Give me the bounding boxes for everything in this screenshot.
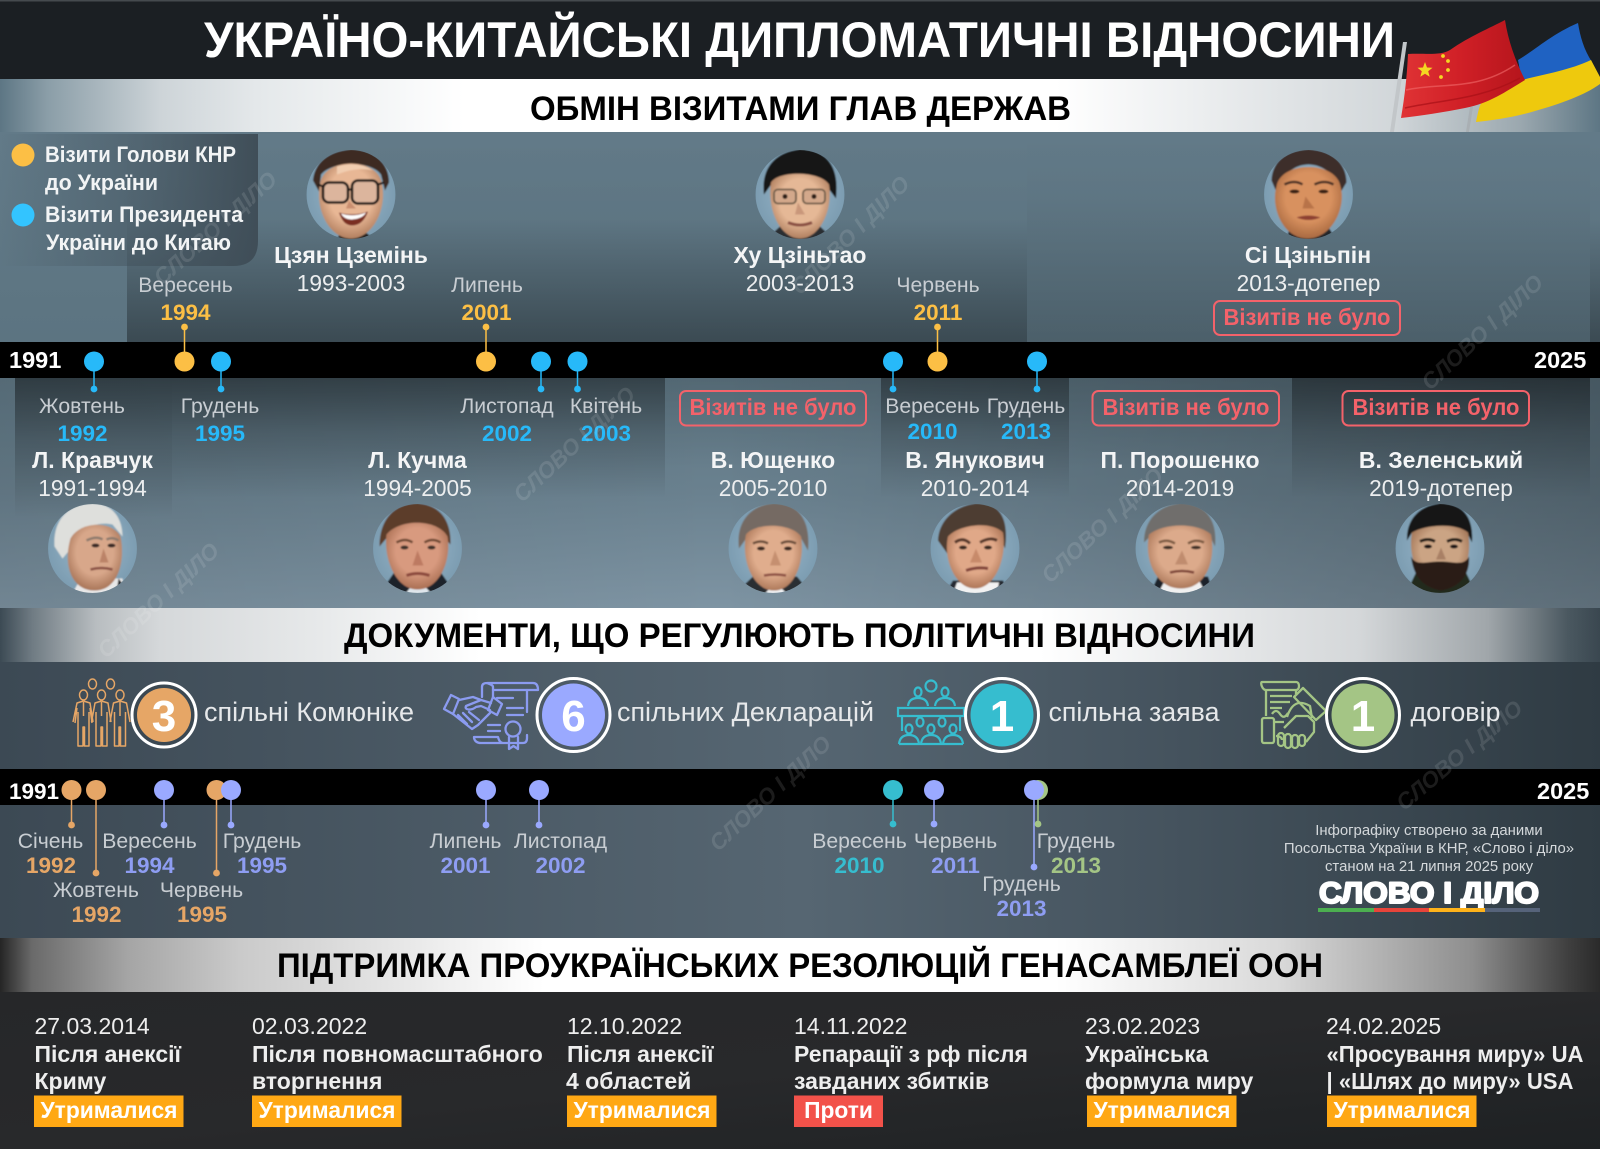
legend panel [0, 134, 258, 266]
marker: December 2013 [1027, 352, 1047, 392]
watermarks [93, 166, 1548, 856]
label: December 1995: Грудень [181, 395, 259, 418]
badge: 3 [132, 683, 196, 747]
timeline: documents [0, 769, 1600, 876]
end year: 2025 [1537, 778, 1589, 804]
label: December 1995: 1995 [237, 853, 287, 878]
resolution: 23.02.2023: Утрималися [1093, 1097, 1231, 1123]
label: September 1994: 1994 [124, 853, 175, 878]
label: April 2003: 2003 [581, 421, 631, 446]
label: June 1995: Червень [160, 879, 243, 902]
label: October 1992 [39, 395, 125, 446]
label: December 1995: 1995 [195, 421, 245, 446]
leader: Kuchma: 1994-2005 [363, 475, 472, 501]
marker: January 1992 [62, 780, 82, 828]
leader: Jiang Zemin: 1993-2003 [297, 270, 405, 296]
label: July 2001 [430, 830, 501, 878]
leader: Zelensky: В. Зеленський [1359, 447, 1523, 473]
resolution: 24.02.2025: Утрималися [1333, 1097, 1471, 1123]
title bar [0, 0, 1600, 79]
label: September 2010 [812, 830, 907, 878]
resolution: 27.03.2014: Криму [34, 1068, 106, 1094]
marker: April 2003 [568, 352, 588, 392]
document stat: communiques [73, 679, 414, 747]
leader: Yanukovych: 2010-2014 [921, 475, 1029, 501]
label: November 2002: Листопад [460, 395, 554, 418]
label: July 2001: Липень [430, 830, 501, 853]
marker: July 2001 [476, 324, 496, 372]
resolution: 12.10.2022: Утрималися [573, 1097, 711, 1123]
flag pole: Ukraine [1466, 107, 1473, 132]
legend label: chairman visits: до України [45, 170, 158, 195]
marker: June 1995 [206, 780, 226, 876]
resolution: 14.11.2022 [794, 1013, 1028, 1127]
credits text: станом на 21 липня 2025 року [1325, 859, 1534, 875]
badge: 1 green: 1 [1351, 692, 1375, 741]
label: June 1995: 1995 [177, 902, 227, 927]
leader: Zelensky: 2019-дотепер [1369, 475, 1513, 501]
title: УКРАЇНО-КИТАЙСЬКІ ДИПЛОМАТИЧНІ ВІДНОСИНИ [204, 11, 1395, 68]
label: September 2010: 2010 [834, 853, 885, 878]
icon: handshake and contract [1261, 682, 1326, 748]
label: September 1994 [138, 274, 233, 325]
resolution: 24.02.2025 [1326, 1013, 1584, 1127]
label: January 1992: 1992 [26, 853, 76, 878]
flag: China [1401, 20, 1525, 118]
stars [1418, 54, 1450, 79]
badge: 1 teal: 1 [990, 692, 1014, 741]
label: December 2013 green [1037, 830, 1115, 878]
icon: people [73, 679, 130, 746]
label: January 1992 [18, 830, 83, 878]
marker: November 2002 [529, 780, 549, 828]
marker: December 2013 purple [1024, 780, 1044, 870]
label: June 2011: 2011 [931, 853, 980, 878]
marker: September 2010 [883, 780, 903, 827]
label: December 2013 green: 2013 [1051, 853, 1101, 878]
section heading band: visits [0, 79, 1600, 132]
marker: December 1995 [221, 780, 241, 828]
portrait: Yushchenko [728, 504, 818, 594]
label: September 2010: 2010 [907, 419, 958, 444]
leader: Poroshenko: П. Порошенко [1100, 447, 1260, 473]
resolution: 12.10.2022 [566, 1013, 716, 1127]
resolution: 23.02.2023: формула миру [1085, 1068, 1254, 1094]
label: September 2010: Вересень [885, 395, 980, 418]
label: June 2011: 2011 [914, 300, 962, 325]
callout: no visits, Zelensky: Візитів не було [1352, 394, 1520, 420]
resolution: 02.03.2022: 02.03.2022 [252, 1013, 367, 1039]
label: July 2001 [451, 274, 523, 325]
resolution: 12.10.2022: 4 областей [566, 1068, 691, 1094]
resolution: 24.02.2025: | «Шлях до миру» USA [1326, 1068, 1574, 1094]
label: December 2013 green: Грудень [1037, 830, 1115, 853]
label: June 2011: Червень [914, 830, 997, 853]
watermarks: СЛОВО І ДІЛО [93, 537, 224, 663]
label: December 1995: Грудень [223, 830, 301, 853]
leader: Yushchenko: В. Ющенко [711, 447, 835, 473]
label: December 2013: Грудень [987, 395, 1065, 418]
end year: 2025 [1534, 347, 1586, 373]
badge: 3: 3 [152, 692, 176, 741]
watermarks: СЛОВО І ДІЛО [1391, 695, 1528, 815]
timeline: visits [0, 324, 1600, 392]
legend label: president visits: Візити Президента [45, 202, 244, 227]
callout: no visits, Yushchenko: Візитів не було [690, 394, 856, 420]
leader: Xi Jinping [1237, 242, 1380, 296]
marker: December 1995 [211, 352, 231, 392]
portrait: Kravchuk [48, 504, 138, 594]
portrait: Poroshenko [1135, 504, 1225, 594]
resolution: 14.11.2022: Репарації з рф після [794, 1041, 1028, 1067]
label: June 1995 [160, 879, 243, 927]
label: December 2013 purple: Грудень [982, 873, 1061, 896]
legend label: president visits: України до Китаю [46, 230, 231, 255]
marker: July 2001 [476, 780, 496, 828]
leader: Kravchuk [32, 447, 153, 501]
label: October 1992: 1992 [57, 421, 108, 446]
label: September 2010 [885, 395, 980, 444]
resolution: 24.02.2025: 24.02.2025 [1326, 1013, 1441, 1039]
callout: no visits, Poroshenko: Візитів не було [1102, 394, 1270, 420]
resolution: 12.10.2022: 12.10.2022 [567, 1013, 682, 1039]
leader: Xi Jinping: 2013-дотепер [1237, 270, 1380, 296]
leader: Yanukovych: В. Янукович [905, 447, 1045, 473]
resolution: 24.02.2025: «Просування миру» UA [1326, 1041, 1584, 1067]
label: September 2010: Вересень [812, 830, 907, 853]
legend label: president visits [45, 202, 244, 255]
label: December 1995 [223, 830, 301, 878]
resolution: 14.11.2022: Проти [804, 1097, 873, 1123]
badge: 6: 6 [561, 692, 586, 741]
legend dot: chairman visits [12, 144, 34, 166]
leader: Hu Jintao: Ху Цзіньтао [734, 242, 866, 268]
resolution: 27.03.2014 [34, 1013, 184, 1127]
document stat: declarations [444, 678, 874, 752]
section heading band: resolutions [0, 938, 1600, 992]
label: December 2013 purple: 2013 [996, 896, 1047, 921]
resolution: 23.02.2023 [1085, 1013, 1254, 1127]
logo: Slovo i Dilo: СЛОВО І ДІЛО [1319, 877, 1539, 910]
legend dot: president visits [12, 204, 34, 226]
marker: June 2011 [924, 780, 944, 827]
leader: Hu Jintao: 2003-2013 [746, 270, 854, 296]
leader: Jiang Zemin [274, 242, 428, 296]
legend label: chairman visits [45, 142, 236, 195]
leader: Kravchuk: 1991-1994 [38, 475, 147, 501]
leader: Yushchenko [711, 447, 835, 501]
panel: documents background [0, 662, 1600, 769]
icon: handshake and scroll [444, 683, 538, 749]
label: treaty: договір [1410, 697, 1500, 727]
label: September 1994 [102, 830, 197, 878]
marker: December 2013 green [1028, 780, 1048, 827]
portrait: Xi Jinping [1264, 150, 1354, 240]
label: December 2013 purple [982, 873, 1061, 921]
label: April 2003 [570, 395, 642, 446]
label: November 2002 [514, 830, 607, 878]
label: September 1994: 1994 [160, 300, 211, 325]
resolution: 02.03.2022: Утрималися [258, 1097, 396, 1123]
resolution: 27.03.2014: 27.03.2014 [34, 1013, 150, 1039]
label: June 2011: Червень [896, 274, 980, 297]
portrait: Jiang Zemin [306, 150, 396, 240]
callout: no visits, Xi: Візитів не було [1224, 304, 1390, 330]
badge: 1 teal [966, 678, 1038, 752]
label: April 2003: Квітень [570, 395, 642, 418]
label: November 2002: 2002 [535, 853, 586, 878]
label: December 1995 [181, 395, 259, 446]
flag: Ukraine [1476, 23, 1600, 122]
flag pole: China [1390, 42, 1407, 132]
portrait: Hu Jintao [755, 150, 845, 240]
leader: Zelensky [1359, 447, 1523, 501]
label: October 1992: Жовтень [53, 879, 139, 902]
label: October 1992 [53, 879, 139, 927]
marker: September 2010 [883, 352, 903, 392]
label: joint statement: спільна заява [1048, 697, 1220, 727]
credits text: Інфографіку створено за даними [1315, 823, 1543, 839]
portrait: Zelensky [1395, 504, 1485, 594]
flags [1390, 20, 1600, 132]
label: June 2011 [896, 274, 980, 325]
panel: heads of state background [0, 132, 1600, 608]
document stat: treaty [1261, 678, 1500, 752]
resolution: 12.10.2022: Після анексії [567, 1041, 714, 1067]
portrait: Kuchma [372, 504, 462, 594]
resolution: 23.02.2023: Українська [1085, 1041, 1209, 1067]
label: January 1992: Січень [18, 830, 83, 853]
label: July 2001: 2001 [440, 853, 491, 878]
credits text [1284, 823, 1574, 875]
label: December 2013: 2013 [1001, 419, 1051, 444]
portrait: Yanukovych [930, 504, 1020, 594]
panel: documents timeline background [0, 805, 1600, 938]
label: communiques: спільні Комюніке [204, 697, 414, 727]
leader: Hu Jintao [734, 242, 866, 296]
watermarks: СЛОВО І ДІЛО [786, 171, 915, 300]
label: September 1994: Вересень [102, 830, 197, 853]
resolution: 27.03.2014: Після анексії [34, 1041, 181, 1067]
heading: visits: ОБМІН ВІЗИТАМИ ГЛАВ ДЕРЖАВ [530, 90, 1071, 128]
credits text: Посольства України в КНР, «Слово і діло» [1284, 841, 1574, 857]
marker: June 2011 [928, 324, 948, 372]
icon: meeting table [898, 680, 964, 744]
marker: October 1992 [84, 352, 104, 392]
marker: November 2002 [531, 352, 551, 392]
resolution: 02.03.2022: вторгнення [252, 1068, 382, 1094]
watermarks: СЛОВО І ДІЛО [509, 381, 640, 507]
label: September 1994: Вересень [138, 274, 233, 297]
label: October 1992: 1992 [71, 902, 122, 927]
marker: October 1992 [86, 780, 106, 876]
resolution: 27.03.2014: Утрималися [40, 1097, 178, 1123]
leader: Yushchenko: 2005-2010 [719, 475, 827, 501]
legend label: chairman visits: Візити Голови КНР [45, 142, 236, 167]
leader: Yanukovych [905, 447, 1045, 501]
badge: 1 green [1326, 678, 1400, 752]
label: declarations: спільних Декларацій [617, 697, 874, 727]
watermarks: СЛОВО І ДІЛО [1037, 462, 1168, 588]
marker: September 1994 [154, 780, 174, 828]
panel: resolutions background [0, 992, 1600, 1149]
resolution: 14.11.2022: завданих збитків [794, 1068, 989, 1094]
leader: Kuchma [363, 447, 472, 501]
resolution: 02.03.2022: Після повномасштабного [252, 1041, 543, 1067]
start year: 1991 [9, 347, 61, 373]
watermarks: СЛОВО І ДІЛО [1417, 269, 1548, 395]
label: November 2002 [460, 395, 554, 446]
leader: Poroshenko: 2014-2019 [1126, 475, 1234, 501]
leader: Kuchma: Л. Кучма [368, 447, 467, 473]
section heading band: documents [0, 608, 1600, 662]
heading: documents: ДОКУМЕНТИ, ЩО РЕГУЛЮЮТЬ ПОЛІТИЧНІ ВІДНОСИНИ [344, 617, 1255, 655]
resolution: 02.03.2022 [252, 1013, 543, 1127]
watermarks: СЛОВО І ДІЛО [705, 730, 836, 856]
start year: 1991 [9, 779, 59, 804]
label: November 2002: Листопад [514, 830, 607, 853]
label: November 2002: 2002 [482, 421, 532, 446]
badge: 6 [537, 678, 610, 752]
leader: Kravchuk: Л. Кравчук [32, 447, 153, 473]
heading: resolutions: ПІДТРИМКА ПРОУКРАЇНСЬКИХ РЕЗОЛЮЦІЙ ГЕНАСАМБЛЕЇ ООН [277, 945, 1323, 985]
label: July 2001: Липень [451, 274, 523, 297]
resolution: 23.02.2023: 23.02.2023 [1085, 1013, 1200, 1039]
marker: September 1994 [174, 324, 194, 372]
label: October 1992: Жовтень [39, 395, 125, 418]
label: December 2013 [987, 395, 1065, 444]
leader: Poroshenko [1100, 447, 1260, 501]
label: June 2011 [914, 830, 997, 878]
label: July 2001: 2001 [461, 300, 512, 325]
leader: Xi Jinping: Сі Цзіньпін [1245, 242, 1371, 268]
document stat: joint statement [898, 678, 1220, 752]
watermarks: СЛОВО І ДІЛО [149, 166, 282, 290]
leader: Jiang Zemin: Цзян Цземінь [274, 242, 428, 268]
resolution: 14.11.2022: 14.11.2022 [794, 1013, 907, 1039]
